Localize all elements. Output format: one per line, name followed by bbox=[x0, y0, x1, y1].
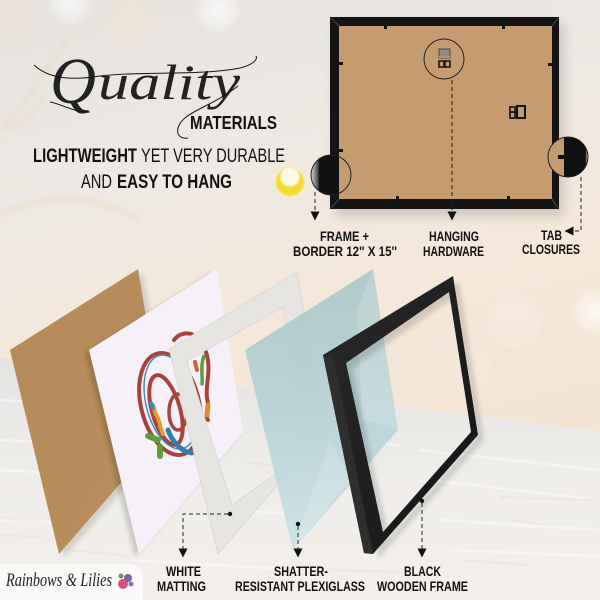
callout circle: hanging hardware bbox=[424, 39, 464, 79]
text block: lightweight yet very durable: LIGHTWEIGHT bbox=[33, 146, 137, 167]
label: white matting: WHITE bbox=[166, 563, 201, 579]
label: white matting bbox=[157, 563, 206, 594]
text block: lightweight yet very durable bbox=[33, 146, 285, 167]
kraft backing board bbox=[339, 26, 552, 199]
text block: and easy to hang: EASY TO HANG bbox=[117, 172, 232, 193]
text block: and easy to hang bbox=[81, 172, 232, 193]
heading: materials: MATERIALS bbox=[190, 113, 277, 133]
panel: plexiglass sheet bbox=[245, 269, 398, 550]
logo: Rainbows and Lilies bbox=[0, 564, 143, 600]
label: hanging hardware bbox=[423, 228, 484, 259]
bokeh lights and branches bbox=[0, 0, 600, 388]
label: white matting: MATTING bbox=[157, 578, 206, 594]
frame side face bbox=[323, 355, 373, 554]
label: shatter-resistant plexiglass: RESISTANT PLEXIGLASS bbox=[235, 578, 365, 594]
label: frame + border bbox=[293, 228, 397, 259]
label: black wooden frame: WOODEN FRAME bbox=[377, 578, 468, 594]
label: black wooden frame: BLACK bbox=[404, 563, 441, 579]
text block: lightweight yet very durable: YET VERY DURABLE bbox=[141, 146, 285, 167]
label: frame + border: FRAME + bbox=[320, 228, 369, 244]
arrow: white matting bbox=[183, 512, 232, 553]
panel: white matting bbox=[169, 272, 325, 554]
bend tabs bbox=[339, 26, 552, 199]
title: Quality script bbox=[34, 45, 256, 138]
label: tab closures: CLOSURES bbox=[522, 241, 580, 257]
black outer frame bbox=[330, 17, 559, 209]
title: Quality script: uality bbox=[98, 54, 241, 110]
panel: white artwork sheet bbox=[85, 269, 243, 557]
label: black wooden frame bbox=[377, 563, 468, 594]
panel: frame back view bbox=[330, 17, 564, 216]
arrow: plexiglass bbox=[296, 522, 300, 553]
logo: Rainbows and Lilies: Rainbows & Lilies bbox=[5, 570, 112, 591]
icon: flower bouquet bbox=[118, 574, 134, 589]
arrow: tab closures bbox=[569, 177, 581, 231]
plexiglass reflections bbox=[293, 269, 398, 550]
arrow: black frame bbox=[420, 499, 424, 553]
panel: black wooden frame bbox=[323, 276, 484, 558]
label: tab closures bbox=[522, 227, 580, 257]
label: frame + border: BORDER 12'' X 15'' bbox=[293, 243, 397, 259]
hardware hanger on right bbox=[510, 106, 525, 118]
callout circle: tab closure bbox=[548, 137, 588, 177]
quilled artwork bbox=[129, 333, 211, 461]
label: shatter-resistant plexiglass bbox=[235, 563, 365, 594]
frame corner mitres bbox=[331, 18, 558, 208]
label: tab closures: TAB bbox=[541, 227, 562, 243]
panel: kraft backing board bbox=[10, 269, 170, 558]
text block: and easy to hang: AND bbox=[81, 172, 112, 193]
arrow: hanging hardware bbox=[451, 80, 453, 216]
icon: glowing yellow bulb bbox=[266, 156, 314, 204]
arrow: frame border bbox=[314, 192, 316, 216]
label: shatter-resistant plexiglass: SHATTER- bbox=[274, 563, 328, 579]
wooden table top bbox=[0, 357, 600, 600]
title: Quality script: Q bbox=[50, 45, 96, 118]
callout circle: frame border bbox=[311, 155, 352, 195]
label: hanging hardware: HARDWARE bbox=[423, 243, 484, 259]
label: hanging hardware: HANGING bbox=[429, 228, 479, 244]
